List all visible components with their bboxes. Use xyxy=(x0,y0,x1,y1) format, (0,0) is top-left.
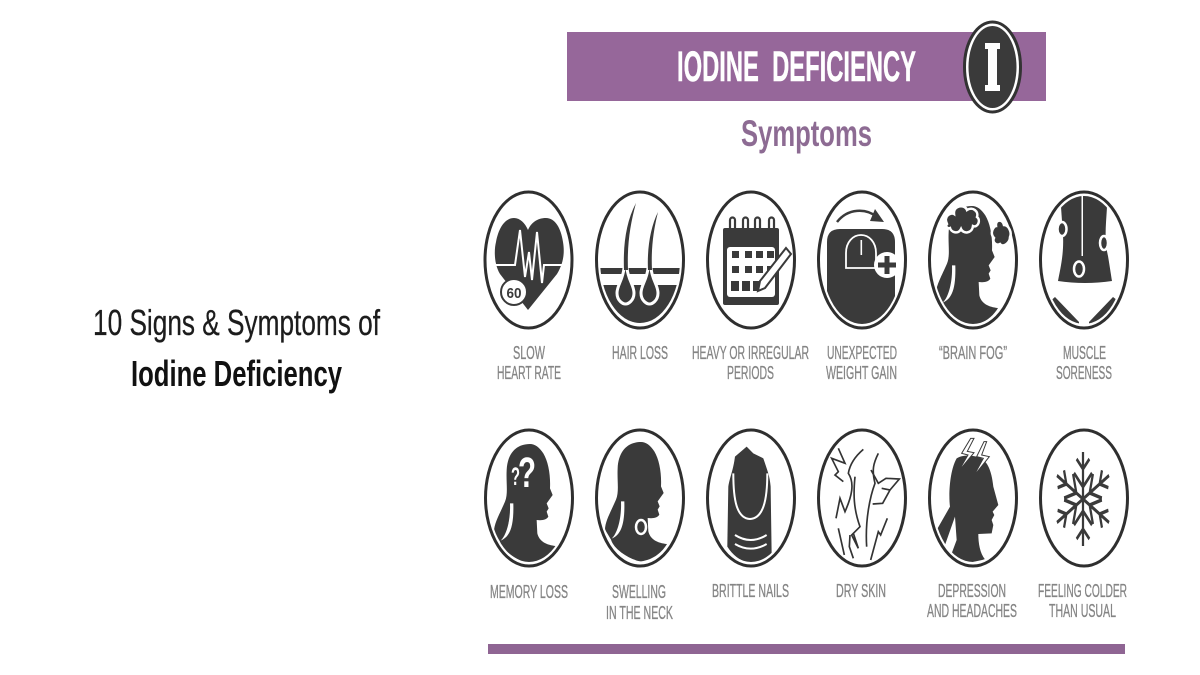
icon: memory loss: ? xyxy=(518,449,536,497)
label: heavy or irregular periods: PERIODS xyxy=(727,363,774,383)
icon: slow heart rate: 60 xyxy=(506,285,522,302)
label: memory loss: MEMORY LOSS xyxy=(490,582,568,602)
label: unexpected weight gain xyxy=(826,343,897,383)
icon: slow heart rate xyxy=(485,192,572,328)
label: feeling colder than usual: THAN USUAL xyxy=(1049,601,1116,621)
icon: unexpected weight gain xyxy=(818,192,906,330)
icon: muscle soreness xyxy=(1040,190,1130,336)
label: muscle soreness: MUSCLE xyxy=(1063,343,1106,363)
label: hair loss: HAIR LOSS xyxy=(612,343,668,363)
left title: 10 Signs & Symptoms of xyxy=(93,302,381,343)
label: unexpected weight gain: UNEXPECTED xyxy=(827,343,897,363)
label: brittle nails: BRITTLE NAILS xyxy=(712,581,789,601)
label: unexpected weight gain: WEIGHT GAIN xyxy=(826,363,897,383)
label: muscle soreness xyxy=(1056,343,1112,383)
label: heavy or irregular periods: HEAVY OR IRREGULAR xyxy=(692,343,809,363)
icon: memory loss: ? xyxy=(511,463,520,491)
icon: memory loss xyxy=(486,430,572,566)
label: depression and headaches: DEPRESSION xyxy=(938,581,1006,601)
left title xyxy=(93,302,381,394)
icon: brittle nails xyxy=(708,430,794,566)
icon: swelling in the neck xyxy=(596,430,684,566)
header banner xyxy=(567,32,1046,101)
label: feeling colder than usual: FEELING COLDER xyxy=(1038,581,1127,601)
left title: Iodine Deficiency xyxy=(131,353,342,394)
icon: feeling colder snowflake xyxy=(1040,430,1128,566)
label: depression and headaches xyxy=(927,581,1017,621)
label: muscle soreness: SORENESS xyxy=(1056,363,1112,383)
label: heavy or irregular periods xyxy=(692,343,809,383)
label: slow heart rate xyxy=(497,343,561,383)
label: slow heart rate: SLOW xyxy=(513,343,545,363)
label: slow heart rate: HEART RATE xyxy=(497,363,561,383)
banner title: IODINE DEFICIENCY xyxy=(677,43,916,91)
icon: depression and headaches xyxy=(930,430,1016,566)
icon: dry skin xyxy=(818,430,906,566)
icon: brain fog xyxy=(930,192,1016,328)
label: dry skin: DRY SKIN xyxy=(836,581,886,601)
subtitle: Symptoms xyxy=(741,113,872,154)
label: swelling in the neck xyxy=(606,582,673,623)
icon: iodine element badge xyxy=(964,22,1020,112)
label: feeling colder than usual xyxy=(1038,581,1127,621)
label: swelling in the neck: IN THE NECK xyxy=(606,603,673,623)
label: depression and headaches: AND HEADACHES xyxy=(927,601,1017,621)
label: brain fog: “BRAIN FOG” xyxy=(939,343,1007,363)
bottom bar xyxy=(488,644,1125,654)
icon: hair loss xyxy=(596,192,686,335)
label: swelling in the neck: SWELLING xyxy=(612,582,666,602)
icon: irregular periods calendar xyxy=(708,192,794,328)
